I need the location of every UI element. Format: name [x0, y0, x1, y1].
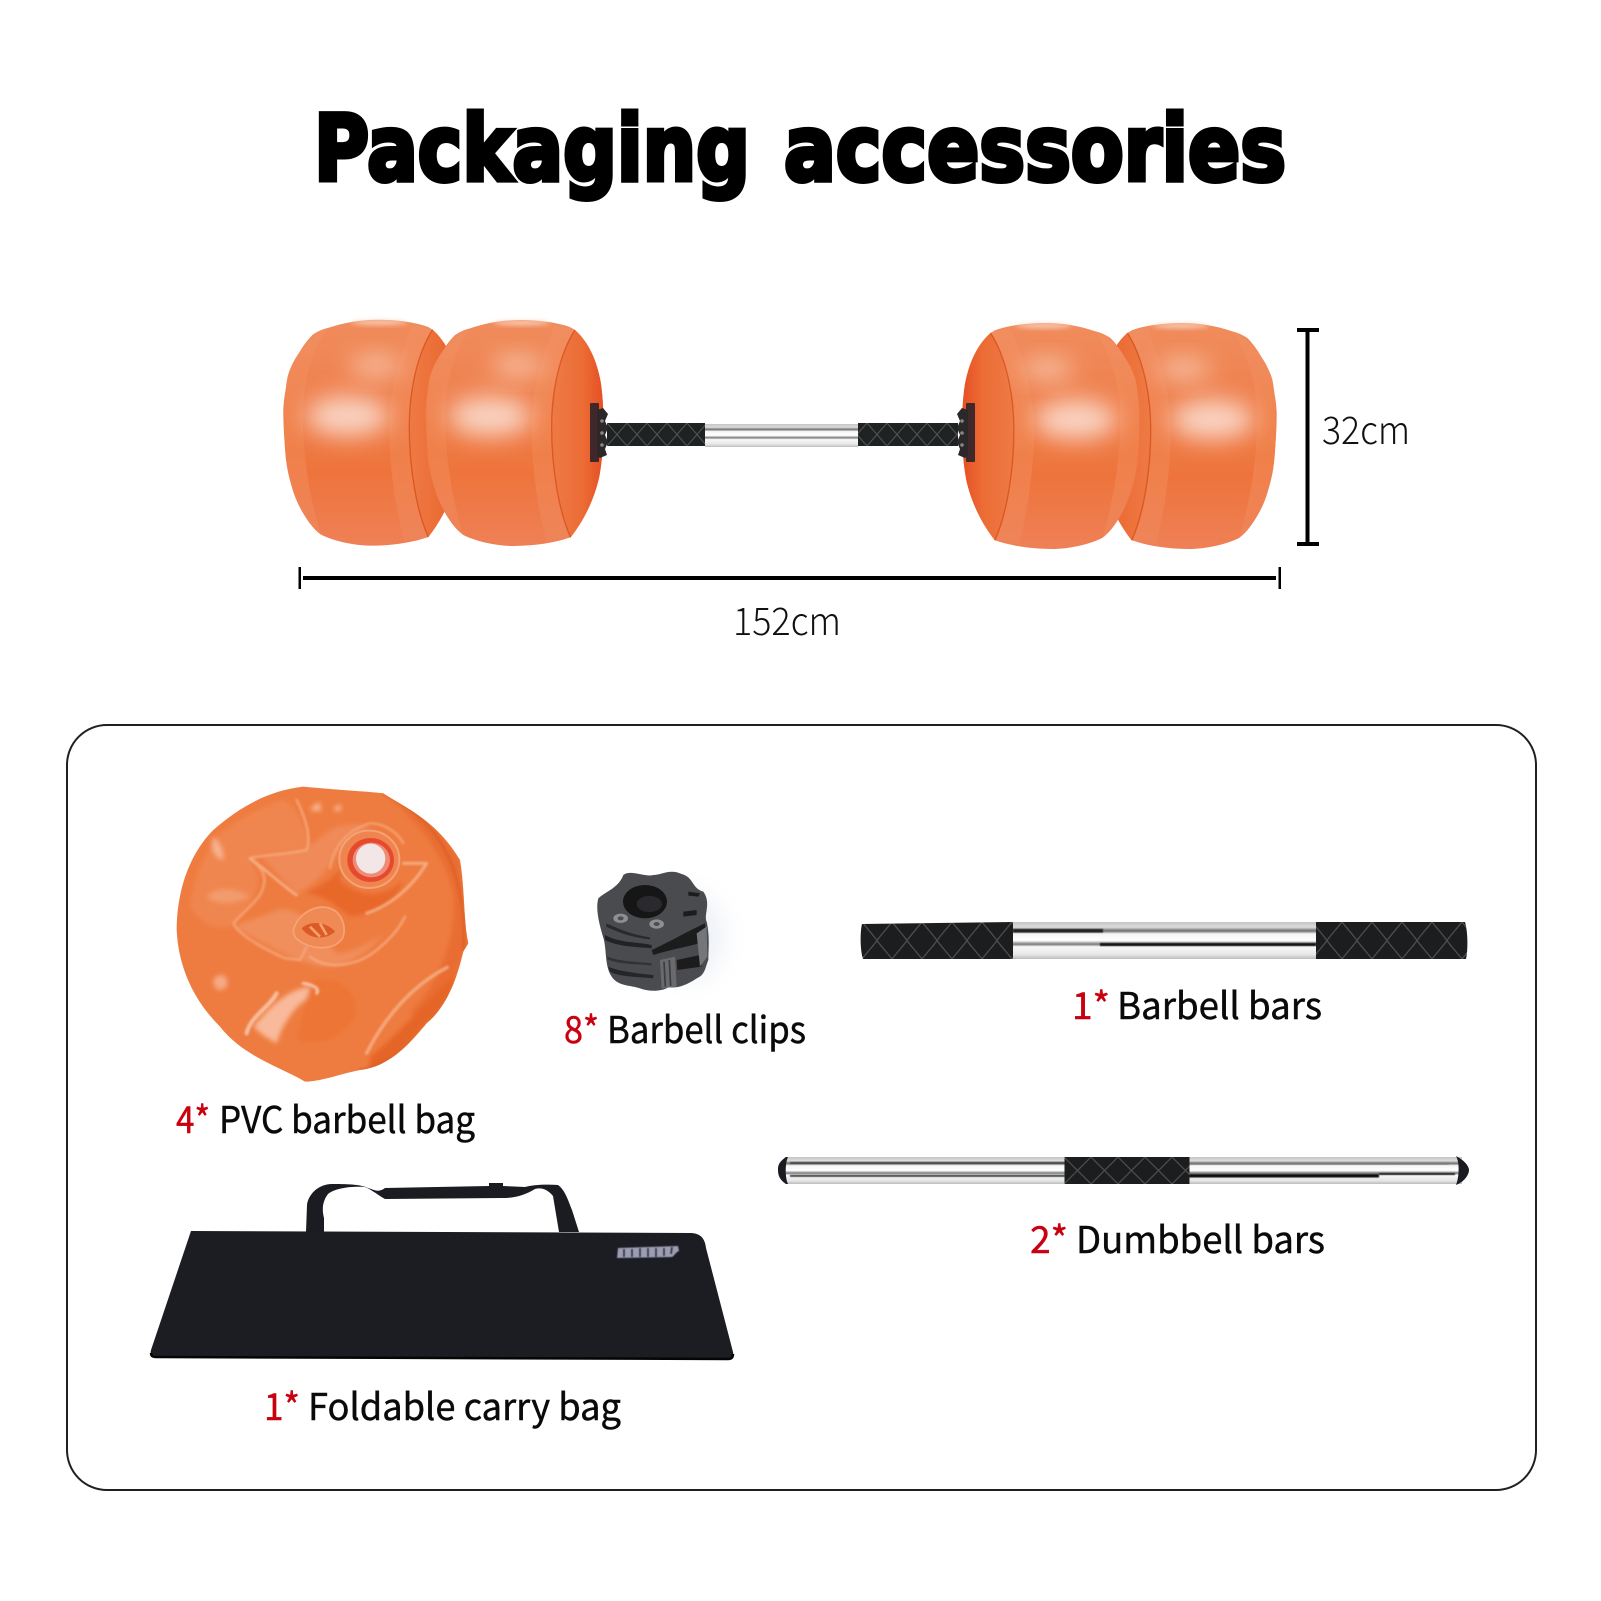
- label: barbell bars: 1*: [1072, 976, 1110, 1030]
- length dimension: [298, 567, 1281, 646]
- label: foldable carry bag: Foldable carry bag: [308, 1377, 621, 1431]
- pursed valve: [293, 907, 344, 948]
- icon: barbell bars: [861, 922, 1467, 959]
- label: barbell clips: 8*: [564, 1000, 599, 1054]
- label: PVC barbell bag: PVC barbell bag: [219, 1090, 475, 1144]
- panel: package contents: [67, 725, 1536, 1490]
- barbell bar: [590, 403, 975, 462]
- label: barbell clips: Barbell clips: [607, 1000, 806, 1054]
- label: barbell bars: Barbell bars: [1117, 976, 1322, 1030]
- icon: PVC barbell bag: [177, 787, 468, 1082]
- bag handle: [306, 1183, 579, 1232]
- barbell left weights: [283, 320, 604, 546]
- valve: [339, 831, 399, 888]
- label: dumbbell bars: 2*: [1030, 1210, 1068, 1264]
- icon: foldable carry bag: [151, 1183, 733, 1359]
- barbell right weights: [962, 323, 1277, 549]
- title: accessories: [784, 97, 1286, 202]
- bag logo: [617, 1246, 679, 1258]
- height dimension: [1297, 328, 1410, 546]
- assembled barbell: [283, 320, 1277, 549]
- label: foldable carry bag: 1*: [264, 1377, 300, 1431]
- title: [314, 97, 1286, 202]
- length dimension: 152cm: [733, 591, 841, 646]
- title: Packaging: [314, 97, 750, 202]
- label: dumbbell bars: Dumbbell bars: [1076, 1210, 1325, 1264]
- label: PVC barbell bag: 4*: [176, 1090, 210, 1144]
- icon: dumbbell bars: [778, 1156, 1469, 1185]
- height dimension: 32cm: [1322, 400, 1410, 455]
- bag body: [151, 1231, 733, 1359]
- icon: barbell clip: [597, 872, 723, 991]
